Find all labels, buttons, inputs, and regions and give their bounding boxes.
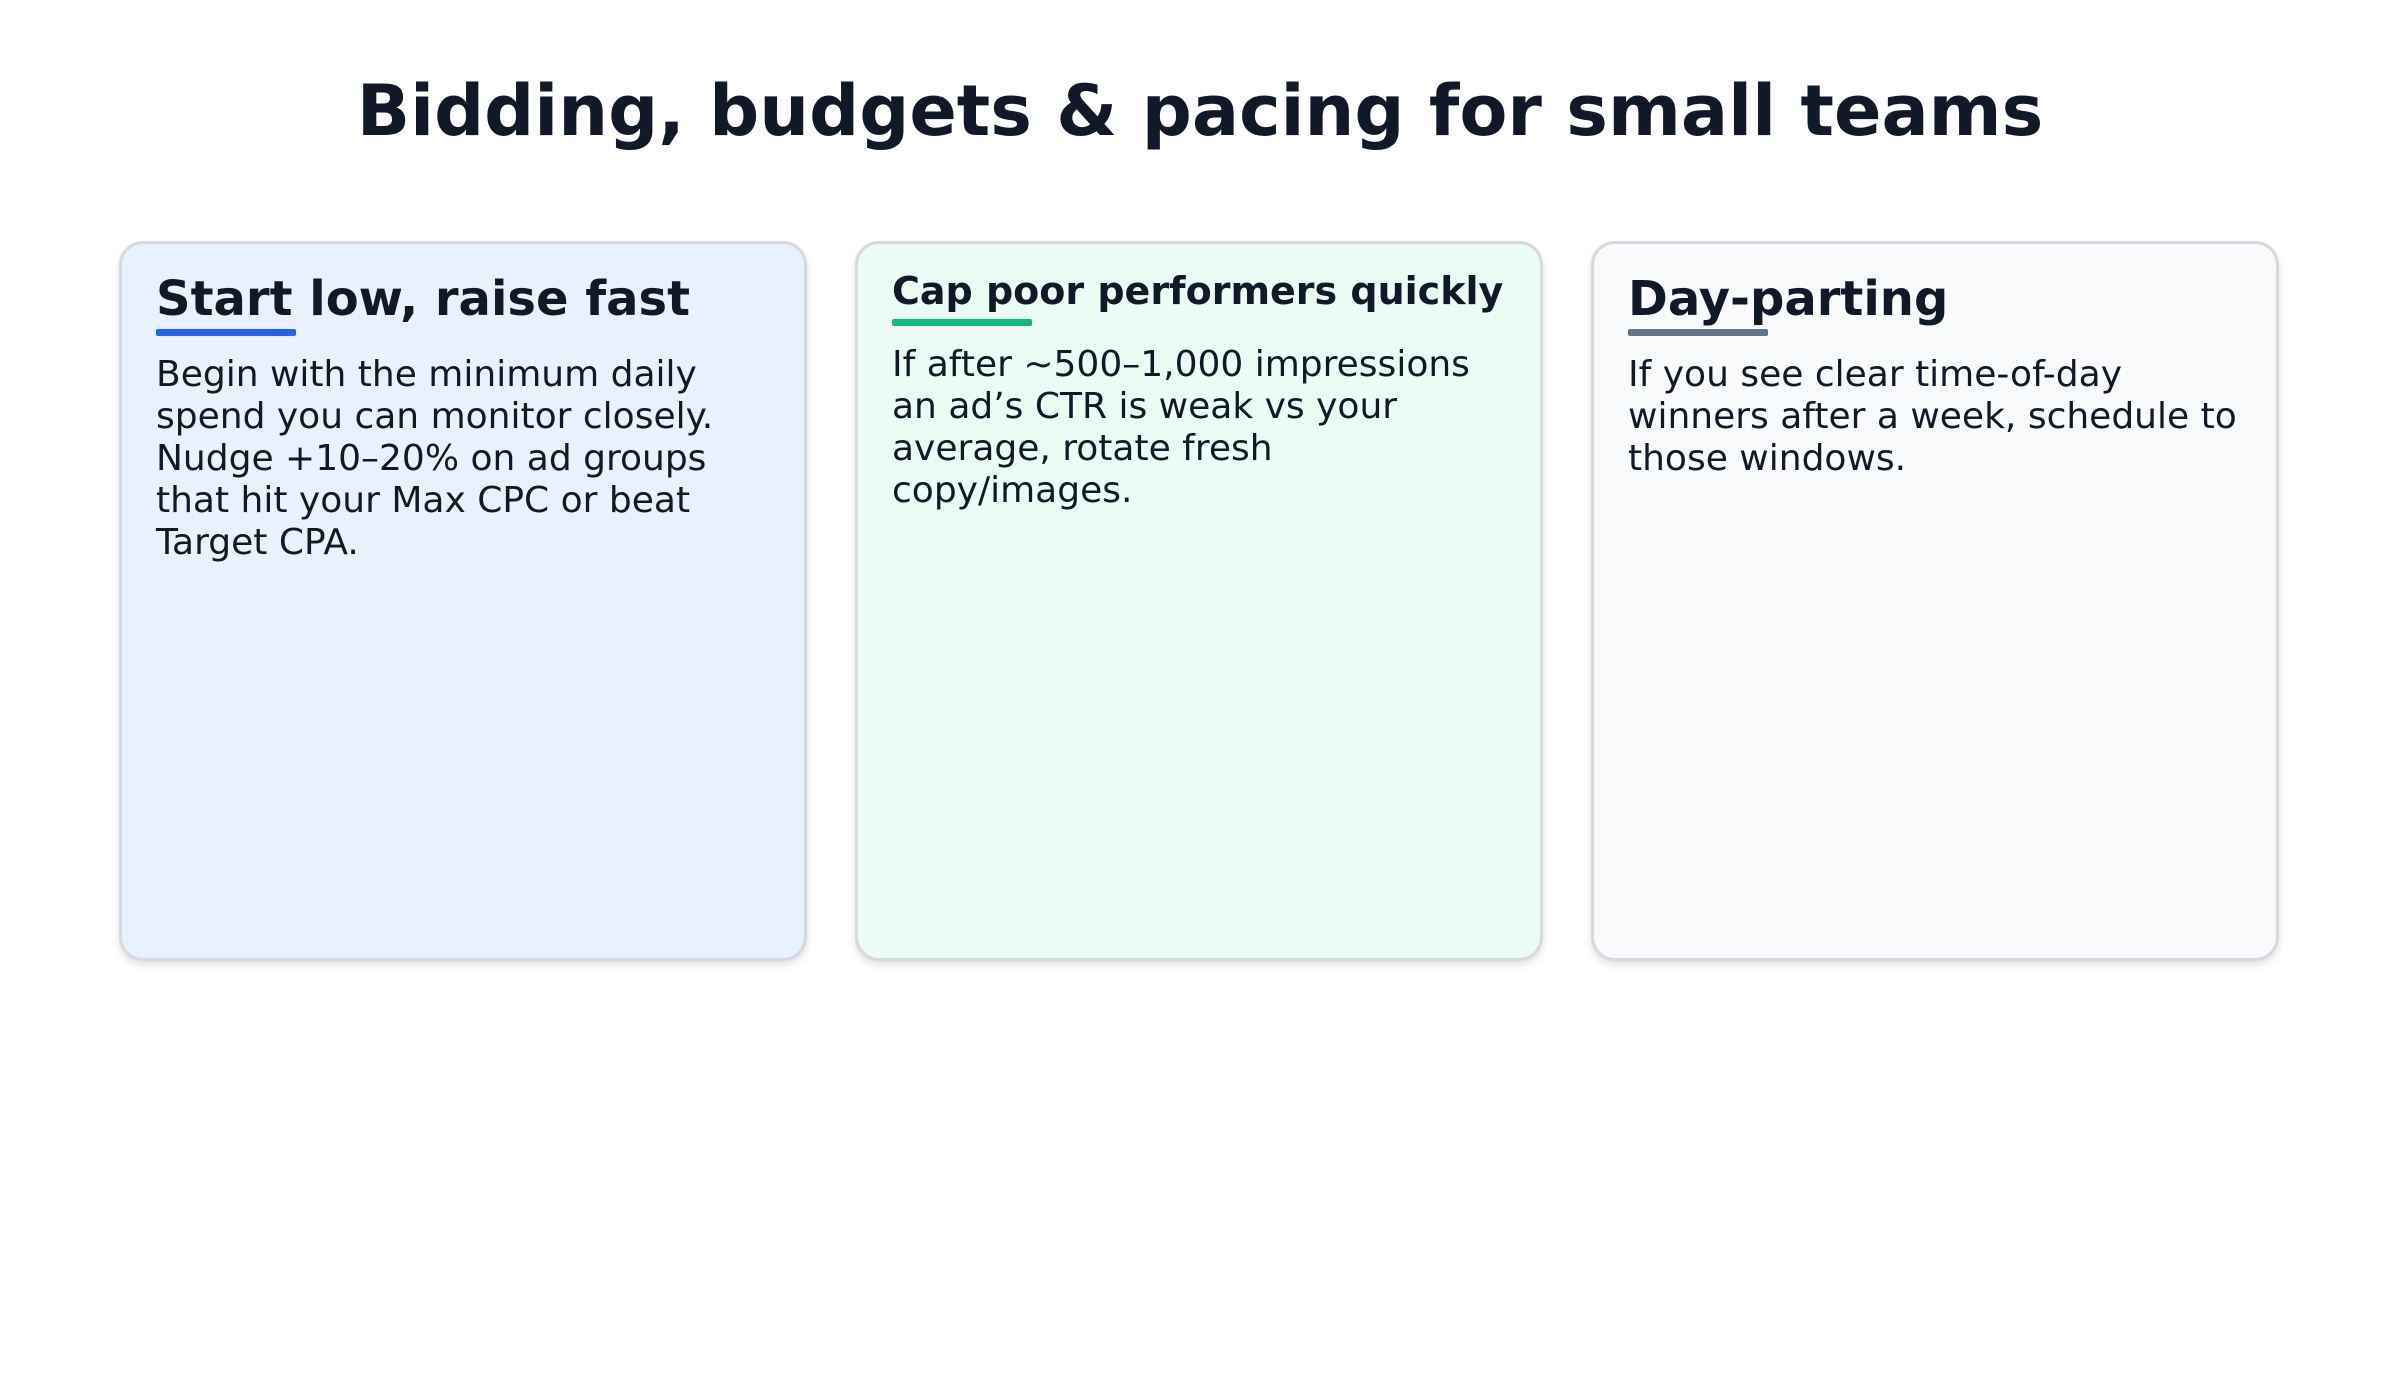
body text: start low: that hit your Max CPC or beat — [156, 480, 690, 521]
body text: day-parting: winners after a week, schedule to — [1628, 396, 2237, 437]
body text: cap poor performers: an ad’s CTR is weak vs your — [892, 386, 1397, 427]
body text: cap poor performers: average, rotate fresh — [892, 428, 1273, 469]
body text: cap poor performers: If after ~500–1,000 impressions — [892, 344, 1470, 385]
heading: start low: Start low, raise fast — [156, 271, 690, 327]
panel: start low — [119, 241, 807, 961]
body text: day-parting: If you see clear time-of-day — [1628, 354, 2122, 395]
panel: cap poor performers — [855, 241, 1543, 961]
underline green — [892, 319, 1032, 326]
heading: cap poor performers: Cap poor performers quickly — [892, 269, 1503, 313]
body text: cap poor performers: copy/images. — [892, 470, 1132, 511]
body text: day-parting: those windows. — [1628, 438, 1906, 479]
underline blue — [156, 329, 296, 336]
body text: start low: Begin with the minimum daily — [156, 354, 697, 395]
body text: day-parting — [1628, 354, 2237, 479]
body text: cap poor performers — [892, 344, 1470, 511]
body text: start low: Target CPA. — [156, 522, 359, 563]
body text: start low: spend you can monitor closely. — [156, 396, 713, 437]
body text: start low: Nudge +10–20% on ad groups — [156, 438, 706, 479]
body text: start low — [156, 354, 713, 563]
underline slate — [1628, 329, 1768, 336]
heading: day-parting: Day-parting — [1628, 271, 1948, 327]
panel: day-parting — [1591, 241, 2279, 961]
title: Bidding, budgets & pacing for small teams — [357, 70, 2043, 152]
